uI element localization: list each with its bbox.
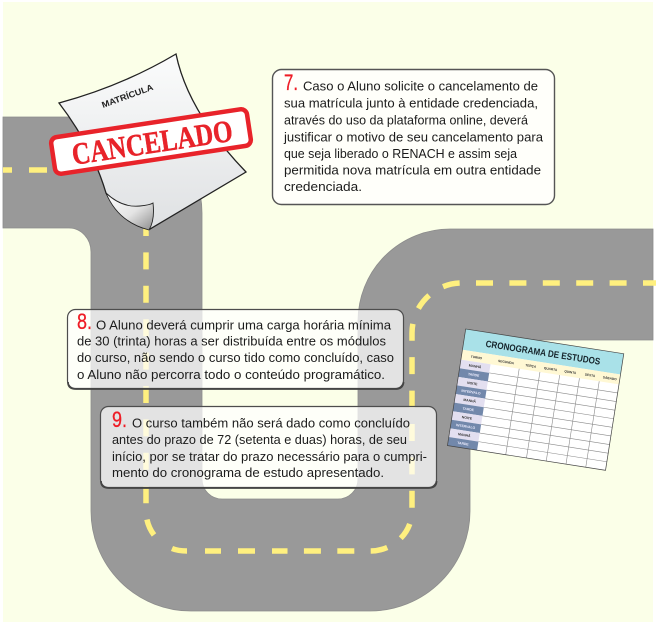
table shift column: MANHÃ bbox=[468, 362, 482, 369]
text 8: O Aluno deverá cumprir uma carga horária mínima bbox=[96, 318, 391, 332]
table header row: TERÇA bbox=[525, 363, 537, 369]
table header row: TURNO bbox=[471, 355, 483, 360]
text 7: através do uso da plataforma online, deverá bbox=[284, 114, 528, 128]
text 9: O curso também não será dado como concluído bbox=[132, 416, 410, 430]
document: matrícula bbox=[59, 54, 246, 230]
table shift column: TARDE bbox=[462, 407, 475, 412]
table header row: SEXTA bbox=[585, 373, 596, 378]
text 7 bbox=[283, 80, 543, 194]
table shift column: NOITE bbox=[467, 381, 478, 386]
panel: item 7 bbox=[272, 70, 554, 204]
table header row: QUINTA bbox=[564, 369, 577, 375]
text 7: que seja liberado o RENACH e assim seja bbox=[284, 147, 517, 161]
number 8: 8. bbox=[77, 309, 92, 334]
text 8 bbox=[77, 318, 394, 382]
text 9: mento do cronograma de estudo apresentado. bbox=[112, 466, 384, 480]
text 9 bbox=[112, 416, 427, 480]
text 7: permitida nova matrícula em outra entidade bbox=[284, 164, 541, 178]
table header row: SEGUNDA bbox=[498, 359, 515, 365]
table grid bbox=[477, 364, 619, 470]
text 9: início, por se tratar do prazo necessário para o cumpri- bbox=[112, 450, 427, 464]
table shift column: TARDE bbox=[468, 372, 480, 378]
panel: item 9 bbox=[100, 406, 436, 488]
text 8: do curso, não sendo o curso tido como concluído, caso bbox=[77, 351, 394, 365]
text 7: credenciada. bbox=[284, 180, 362, 194]
table shift column: TARDE bbox=[457, 441, 470, 447]
panel: item 8 bbox=[68, 309, 404, 389]
table header row bbox=[461, 350, 621, 384]
table shift column bbox=[447, 360, 491, 450]
table shift column: NOITE bbox=[462, 415, 473, 421]
stamp text: CANCELADO bbox=[69, 113, 235, 172]
text 7: Caso o Aluno solicite o cancelamento de bbox=[303, 80, 538, 94]
table shift column: INTERVALO bbox=[461, 389, 481, 396]
road bbox=[3, 117, 656, 611]
text 7: justificar o motivo de seu cancelamento para bbox=[283, 130, 543, 144]
table header row: SÁBADO bbox=[603, 374, 618, 382]
table title bar bbox=[462, 329, 624, 375]
page curl bbox=[106, 193, 154, 230]
text 7: sua matrícula junto à entidade credenciada, bbox=[284, 96, 538, 110]
table shift column: MANHÃ bbox=[458, 431, 471, 438]
number 7: 7. bbox=[284, 70, 298, 95]
schedule table bbox=[447, 329, 624, 470]
table header row: QUARTA bbox=[544, 366, 558, 372]
text 9: antes do prazo de 72 (setenta e duas) horas, de seu bbox=[112, 433, 407, 447]
table shift column: INTERVALO bbox=[456, 423, 476, 430]
document title: MATRÍCULA bbox=[100, 82, 154, 110]
road centre dashes bbox=[3, 170, 656, 551]
text 8: de 30 (trinta) horas a ser distribuída entre os módulos bbox=[77, 334, 386, 348]
number 9: 9. bbox=[112, 407, 127, 432]
stamp: cancelado bbox=[50, 108, 252, 175]
table shift column: MANHÃ bbox=[463, 397, 477, 404]
table title bar: CRONOGRAMA DE ESTUDOS bbox=[485, 338, 601, 367]
text 8: o Aluno não percorra todo o conteúdo programático. bbox=[77, 368, 385, 382]
